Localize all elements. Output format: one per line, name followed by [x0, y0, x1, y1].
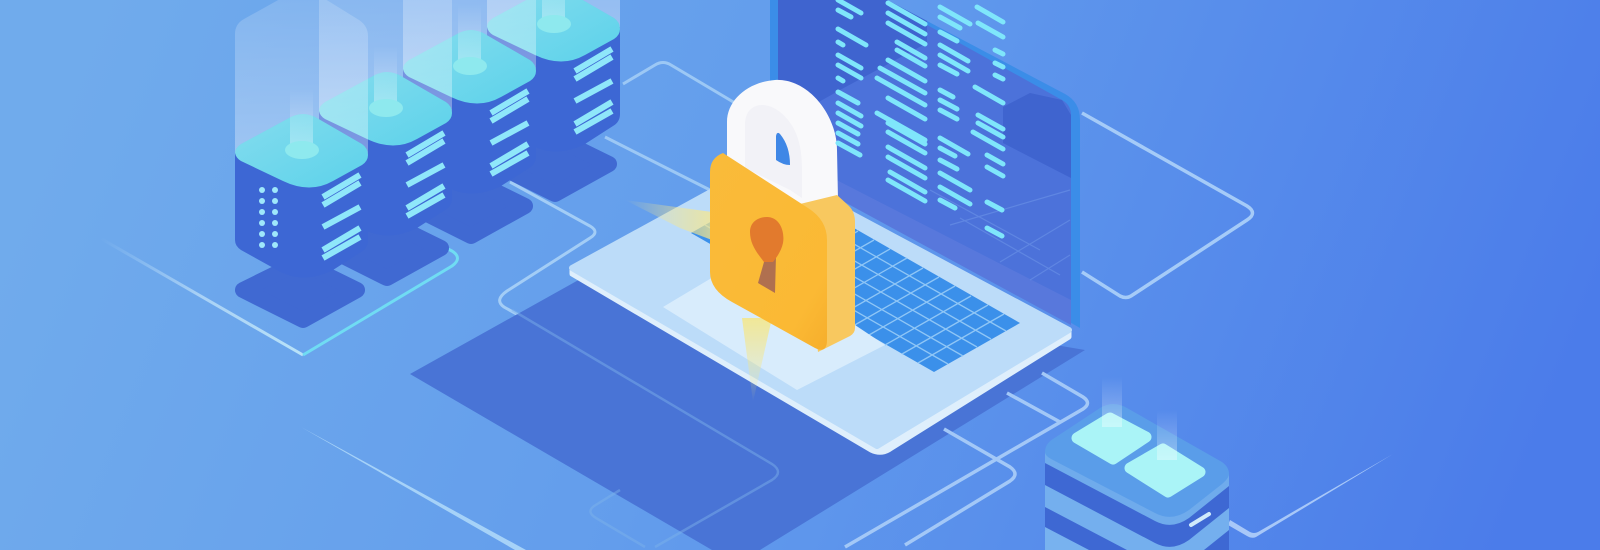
padlock — [710, 80, 855, 352]
code lines hologram — [838, 0, 1003, 236]
screen lower reflection — [778, 150, 1071, 325]
touchpad — [663, 255, 885, 390]
circuit line: left server trace — [100, 231, 458, 355]
circuit lines near rack — [845, 373, 1088, 547]
rack top face — [1045, 404, 1229, 517]
server rack 3 — [403, 0, 536, 236]
keyhole — [750, 217, 783, 293]
lock body side — [800, 195, 855, 352]
circuit line: right loop behind screen — [1082, 113, 1252, 298]
server rack 2 — [319, 0, 452, 278]
rack slot — [1191, 514, 1209, 525]
lock body front — [710, 153, 827, 350]
storage rack lower right — [1045, 377, 1229, 550]
light glow rays from lock — [625, 200, 772, 402]
keyboard — [691, 184, 1020, 372]
tapered accent line lower left — [301, 427, 526, 550]
circuit line: upper traces behind lock — [605, 62, 735, 190]
cyan tile 1 — [1077, 418, 1146, 459]
server racks row — [235, 0, 620, 320]
shackle — [727, 80, 838, 214]
server rack 4 — [487, 0, 620, 194]
laptop ground shadow — [410, 268, 1085, 550]
laptop base top — [572, 165, 1069, 446]
laptop base edge — [572, 268, 1069, 452]
tapered accent line lower right — [1228, 454, 1393, 538]
cyan tile 2 — [1130, 449, 1200, 492]
server status dots — [259, 187, 278, 248]
shackle opening — [776, 133, 790, 165]
laptop screen frame — [770, 0, 1080, 328]
circuit lines inside shadow — [512, 310, 778, 547]
screen dark facets — [778, 0, 1071, 178]
server rack 1 — [235, 0, 368, 320]
screen panel — [778, 0, 1071, 310]
laptop — [572, 0, 1080, 452]
rack layers — [1045, 410, 1229, 550]
circuit line: middle trace — [500, 182, 595, 316]
light pillar 2 — [1157, 410, 1177, 460]
light pillar 1 — [1102, 377, 1122, 427]
